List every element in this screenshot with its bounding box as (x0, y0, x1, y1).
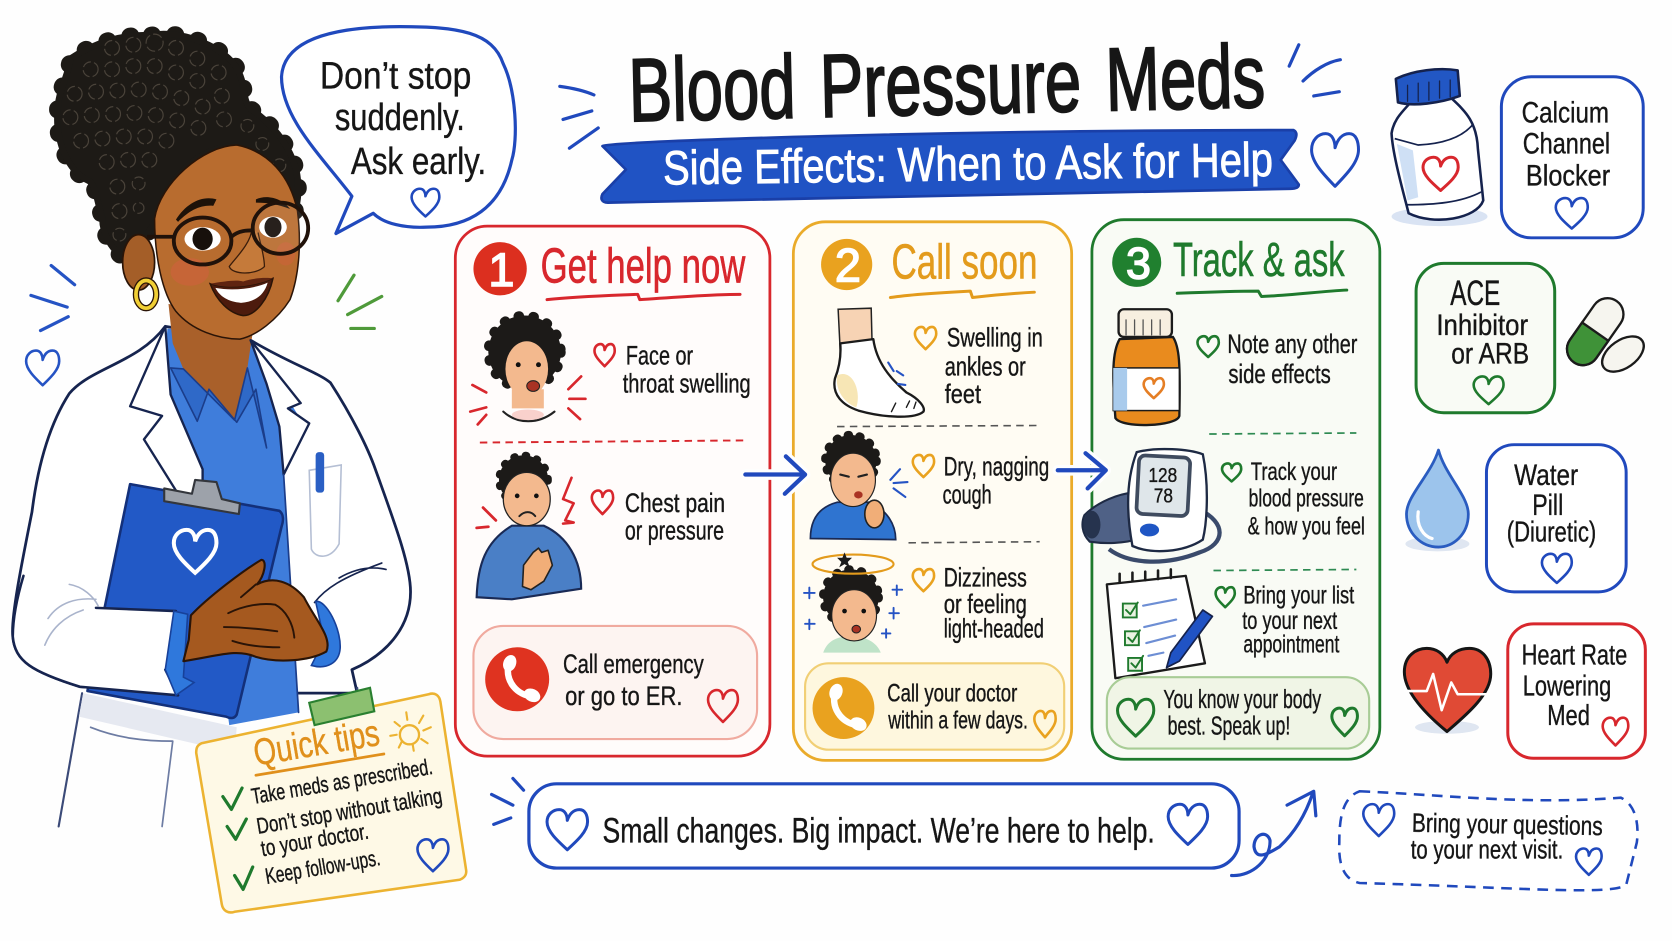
label: water pill (1486, 445, 1626, 592)
right cuff (311, 601, 340, 667)
icon: dizzy person (804, 552, 902, 653)
heading: get help now (473, 240, 746, 300)
panel: get help now (455, 226, 770, 756)
sparks left of slogan (492, 778, 524, 824)
label: water pill: Water (1514, 459, 1578, 492)
callout: call your doctor: within a few days. (888, 707, 1028, 734)
note: quick tips (196, 688, 466, 912)
coat body (13, 326, 411, 826)
label: calcium channel blocker: Blocker (1526, 160, 1610, 193)
tip list: Don’t stop without talking (255, 783, 444, 839)
icon: water drop (1405, 450, 1469, 551)
blue shirt (162, 328, 299, 725)
sparks around the doctor (31, 266, 382, 331)
icon: heart left of doctor (26, 351, 59, 385)
neck (168, 304, 254, 420)
text: bring your list: Bring your list (1243, 583, 1354, 610)
text: dizziness: light-headed (944, 614, 1044, 644)
title: Blood Pressure Meds (627, 26, 1266, 140)
icon: amber pill bottle (1113, 309, 1180, 425)
label: calcium channel blocker: Calcium (1522, 97, 1609, 130)
speech bubble: suddenly. (335, 96, 465, 139)
hair (57, 34, 298, 261)
heading: track and ask: Track & ask (1173, 234, 1345, 287)
text: dizziness (913, 563, 1044, 644)
left cuff (165, 611, 194, 695)
arrow: red panel to orange panel (745, 456, 805, 494)
heading: get help now: Get help now (541, 240, 746, 294)
heading: call soon: 2 (835, 240, 861, 292)
text: swelling in ankles or feet: feet (945, 379, 982, 409)
label: heart rate lowering med: Heart Rate (1522, 639, 1627, 671)
icon: ribbon heart (1312, 134, 1358, 186)
label: calcium channel blocker: Channel (1523, 128, 1610, 161)
label: heart rate lowering med: Med (1547, 700, 1590, 732)
panel: track and ask (1082, 220, 1380, 759)
icon: blood pressure monitor (1082, 449, 1220, 562)
icon: swollen foot (834, 308, 924, 417)
label: heart rate lowering med: Lowering (1523, 670, 1611, 702)
tip list: Keep follow-ups. (263, 845, 382, 889)
heading: track and ask (1112, 234, 1347, 296)
icon: clipboard heart (174, 530, 216, 573)
text: swelling in ankles or feet: Swelling in (947, 323, 1043, 353)
callout: you know your body: best. Speak up! (1168, 713, 1290, 741)
icon: person with swollen face (470, 316, 585, 424)
text: bring your list: appointment (1243, 632, 1339, 659)
face (147, 145, 308, 339)
icon: blood pressure monitor: 128 (1148, 465, 1177, 487)
ear and earring (123, 235, 156, 308)
right sleeve fold lines (315, 563, 386, 603)
text: dizziness: or feeling (944, 589, 1027, 619)
hands (183, 560, 328, 661)
heading: quick tips: Quick tips (250, 711, 382, 774)
callout: call your doctor: Call your doctor (887, 681, 1017, 708)
callout: bring your questions: to your next visit. (1411, 834, 1563, 864)
icon: checklist and pen (1107, 569, 1212, 678)
text: dry nagging cough: Dry, nagging (944, 452, 1049, 482)
text: track your blood pressure: blood pressure (1249, 486, 1364, 513)
text: track your blood pressure: & how you feel (1248, 513, 1365, 540)
label: water pill: Pill (1532, 489, 1563, 522)
arrow: orange panel to green panel (1058, 453, 1106, 488)
text: chest pain or pressure (592, 488, 725, 546)
callout: bring your questions (1339, 791, 1638, 890)
clipboard (87, 480, 283, 718)
text: swelling in ankles or feet: ankles or (945, 351, 1026, 381)
text: bring your list (1216, 583, 1354, 659)
label: calcium channel blocker (1501, 77, 1643, 238)
smile (210, 278, 273, 316)
speech bubble: Ask early. (351, 140, 486, 183)
callout: bring your questions: Bring your questions (1412, 808, 1603, 841)
icon: note heart (417, 839, 448, 871)
callout: call emergency (473, 626, 757, 739)
text: chest pain or pressure: Chest pain (625, 488, 725, 518)
text: track your blood pressure (1222, 459, 1365, 540)
text: note other side effects: side effects (1228, 359, 1331, 389)
text: dry nagging cough (913, 452, 1049, 509)
banner: slogan (529, 784, 1239, 868)
icon: blood pressure monitor: 78 (1154, 485, 1173, 507)
callout: call your doctor (805, 663, 1064, 750)
title sparks (560, 45, 1340, 148)
character: doctor holding a clipboard (13, 34, 411, 826)
tape (309, 688, 374, 725)
tip list: to your doctor. (259, 819, 370, 861)
callout: you know your body (1107, 677, 1369, 749)
icon: capsule and pill (1561, 292, 1650, 379)
heading: call soon (821, 235, 1038, 298)
text: note other side effects (1197, 329, 1358, 389)
arrow: curly arrow (1232, 791, 1316, 876)
label: ace inhibitor or arb (1416, 263, 1555, 413)
label: ace inhibitor or arb: Inhibitor (1436, 309, 1528, 342)
text: swelling in ankles or feet (915, 323, 1043, 409)
text: face or throat swelling: Face or (626, 341, 693, 371)
icon: person coughing (810, 435, 907, 540)
panel: call soon (793, 222, 1072, 760)
text: face or throat swelling (594, 341, 751, 398)
icon: bubble heart (412, 189, 439, 216)
label: heart rate lowering med (1508, 624, 1645, 758)
label: water pill: (Diuretic) (1507, 517, 1596, 549)
heading: call soon: Call soon (891, 235, 1038, 289)
text: chest pain or pressure: or pressure (625, 516, 724, 546)
icon: white pill bottle (1392, 69, 1488, 226)
banner: slogan: Small changes. Big impact. We’re here to help. (602, 811, 1155, 850)
speech bubble: Don’t stop (320, 55, 471, 98)
tip list: Take meds as prescribed. (249, 754, 434, 809)
heading: get help now: 1 (488, 244, 514, 296)
speech bubble (282, 27, 515, 234)
collar and lapels (130, 326, 309, 712)
label: ace inhibitor or arb: or ARB (1451, 338, 1529, 371)
left sleeve (13, 576, 178, 695)
glasses (147, 203, 308, 264)
heading: track and ask: 3 (1126, 238, 1151, 288)
icon: heart with pulse (1404, 648, 1491, 734)
text: dry nagging cough: cough (943, 479, 992, 509)
callout: call emergency: or go to ER. (565, 681, 682, 711)
text: bring your list: to your next (1242, 608, 1337, 635)
label: ace inhibitor or arb: ACE (1450, 274, 1500, 313)
callout: call emergency: Call emergency (563, 649, 704, 679)
coat pocket with pen (309, 452, 341, 556)
text: note other side effects: Note any other (1227, 329, 1358, 359)
tip list (223, 754, 444, 889)
icon: person with chest pain (477, 455, 581, 599)
callout: you know your body: You know your body (1163, 686, 1321, 714)
subtitle ribbon: Side Effects: When to Ask for Help (663, 134, 1273, 195)
text: face or throat swelling: throat swelling (623, 368, 751, 398)
text: track your blood pressure: Track your (1251, 459, 1337, 486)
text: dizziness: Dizziness (944, 563, 1027, 593)
